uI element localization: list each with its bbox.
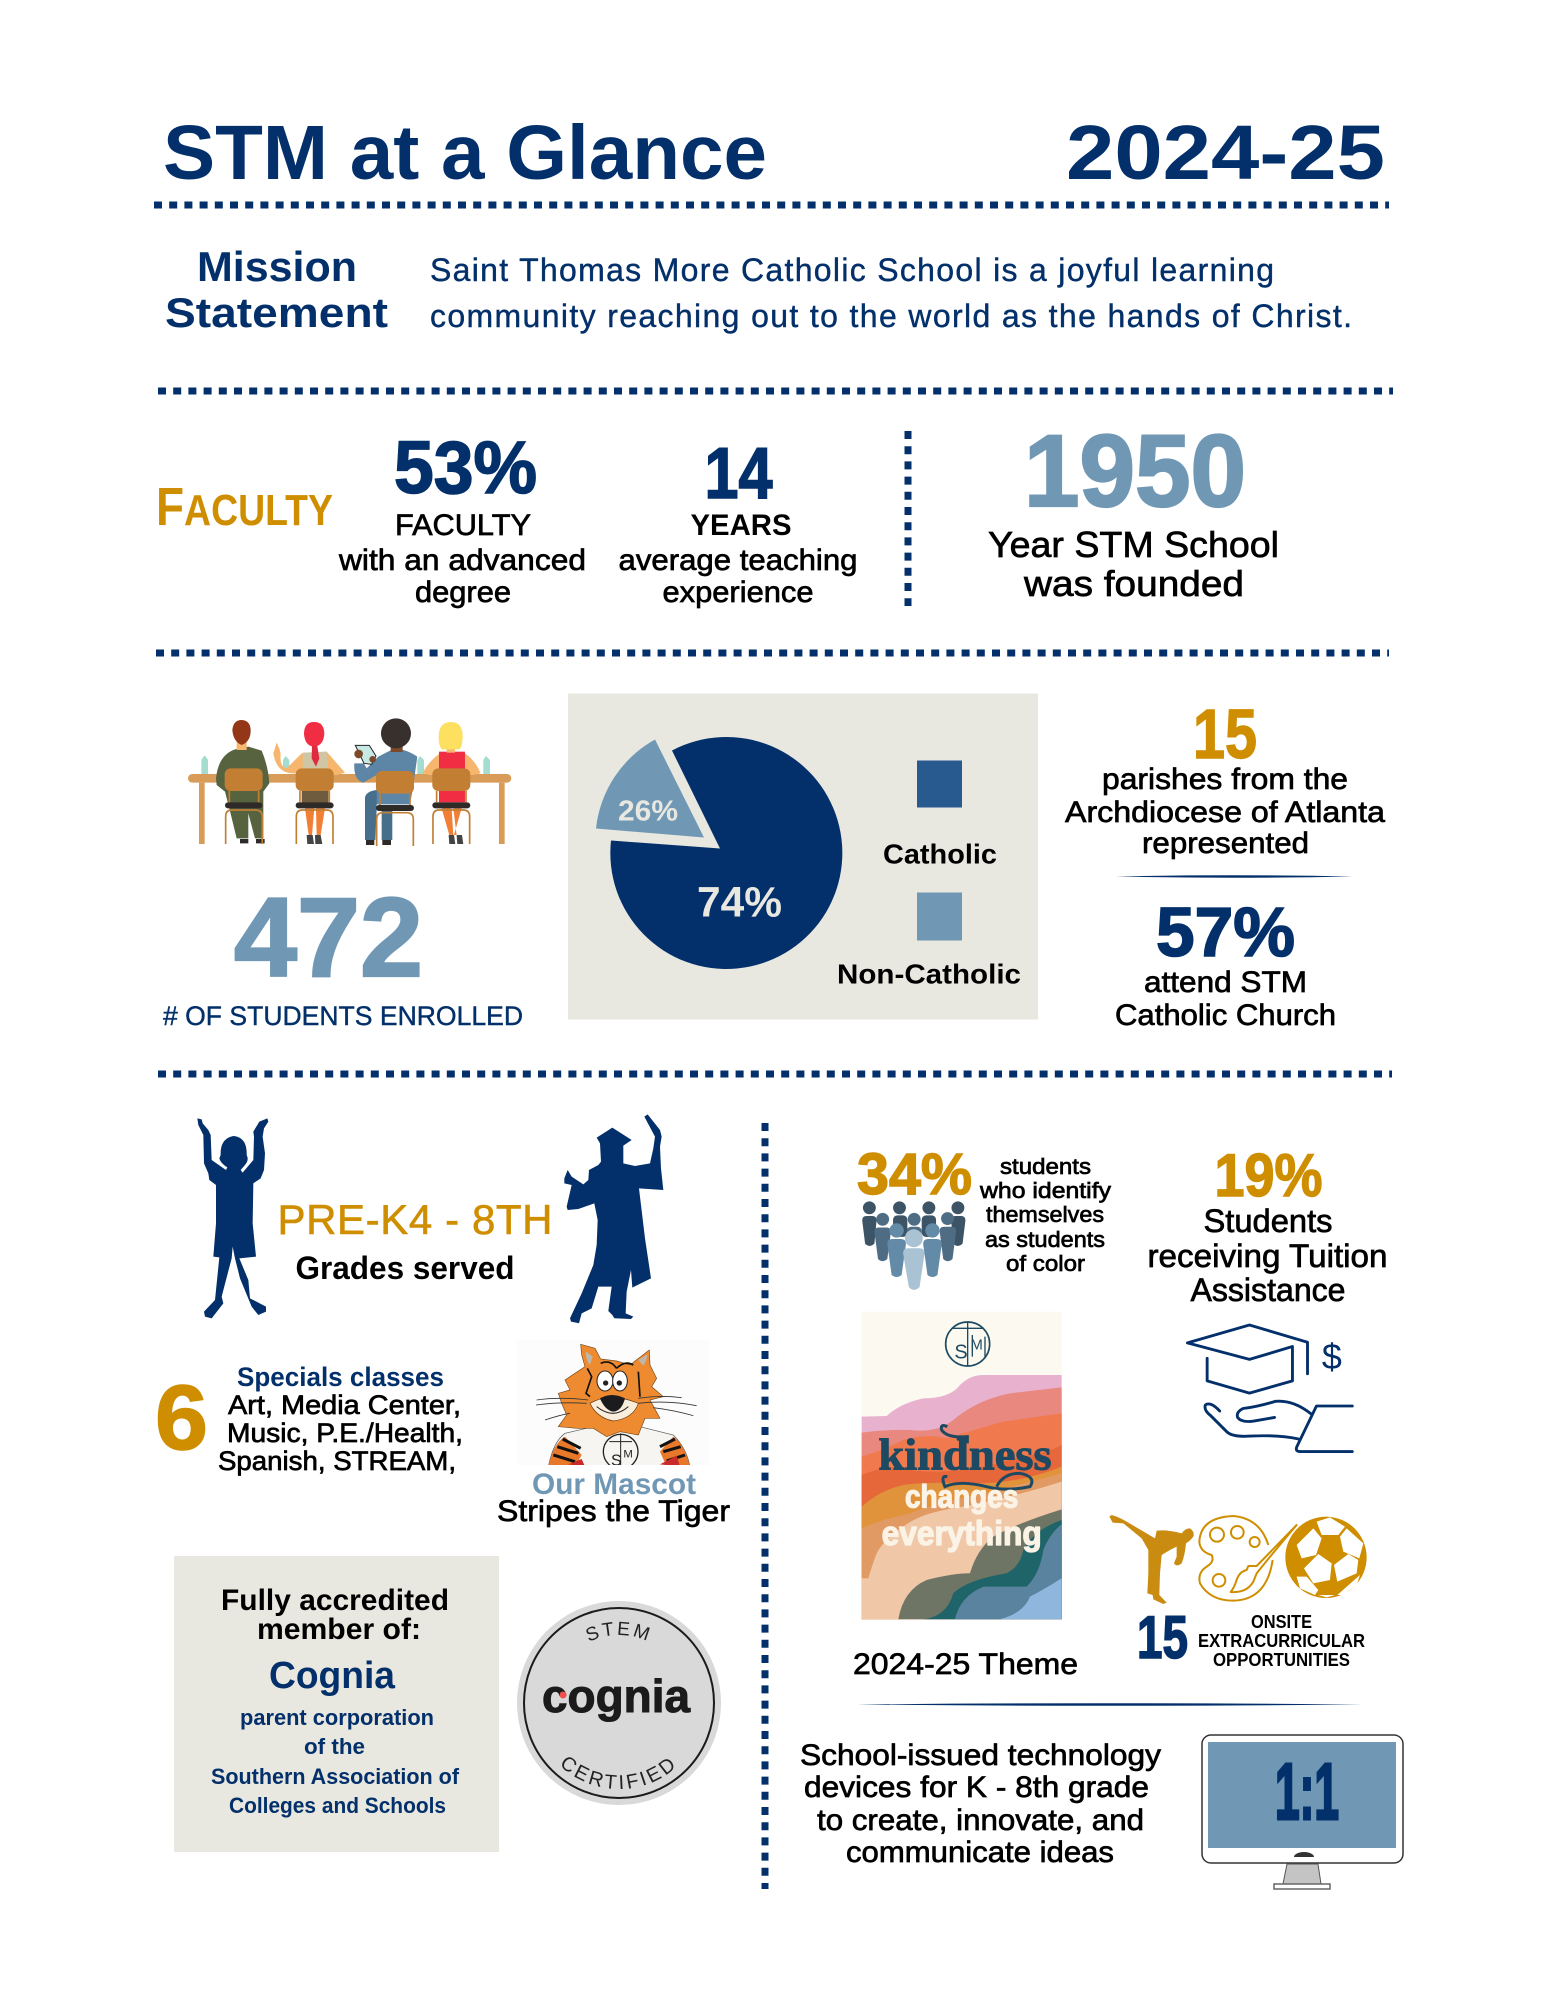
faculty stat: 53%: 53% <box>394 426 537 509</box>
specials classes: Spanish, STREAM, <box>218 1446 456 1476</box>
faculty stat: 14 years <box>618 434 858 609</box>
stat: tuition assistance: Assistance <box>1190 1272 1346 1308</box>
stat: tuition assistance: Students <box>1204 1203 1332 1239</box>
church attendance stat: Catholic Church <box>1115 999 1336 1032</box>
faculty stat: 53%: degree <box>415 576 511 609</box>
icon: tiger mascot: S <box>611 1453 622 1470</box>
poster: 2024-25 theme: M <box>971 1337 983 1353</box>
school year: 2024-25 <box>1066 110 1385 196</box>
pie label 26%: 26% <box>618 796 678 828</box>
specials classes: 6 <box>155 1367 208 1469</box>
technology text <box>800 1739 1161 1869</box>
grades served <box>278 1196 552 1286</box>
mission statement text <box>430 252 1352 334</box>
icon: graduate silhouette <box>564 1114 663 1323</box>
faculty label: FACULTY <box>156 477 333 537</box>
faculty stat: 53% <box>338 426 586 609</box>
stat: tuition assistance: 19% <box>1214 1142 1322 1209</box>
panel: accreditation: Cognia <box>269 1655 396 1697</box>
poster: 2024-25 theme <box>862 1312 1062 1619</box>
legend Non-Catholic <box>837 892 1021 990</box>
parishes stat: represented <box>1142 827 1309 860</box>
legend Non-Catholic: Non-Catholic <box>837 958 1021 990</box>
legend Catholic: Catholic <box>883 838 997 870</box>
faculty stat: 14 years: experience <box>662 576 814 609</box>
stat: students of color: as students <box>985 1227 1105 1252</box>
icon: paint palette <box>1199 1516 1297 1601</box>
icon: computer monitor 1:1: 1:1 <box>1275 1747 1339 1836</box>
mascot caption: Our Mascot <box>532 1468 696 1501</box>
stat: students of color <box>857 1142 1111 1276</box>
founding year: 1950 <box>1024 414 1246 528</box>
panel: accreditation: member of: <box>257 1613 421 1646</box>
badge: Cognia STEM certified: STEM <box>586 1622 650 1640</box>
stat: extracurricular opportunities: ONSITE <box>1251 1612 1312 1632</box>
founding year <box>988 414 1279 604</box>
pie slice: 26% <box>596 740 704 838</box>
icon: computer monitor 1:1 <box>1202 1735 1403 1889</box>
icon: group of people <box>862 1201 965 1290</box>
grades served: PRE-K4 - 8TH <box>278 1196 552 1243</box>
poster: 2024-25 theme: kindness <box>878 1429 1052 1479</box>
illustration: students at table <box>188 718 511 846</box>
pie slice: 74% <box>610 737 842 969</box>
icon: child silhouette <box>197 1118 268 1318</box>
badge: Cognia STEM certified: cognia <box>542 1670 690 1722</box>
mission statement text: community reaching out to the world as the hands of Christ. <box>430 298 1352 334</box>
stat: extracurricular opportunities: OPPORTUNITIES <box>1213 1650 1350 1670</box>
technology text: School-issued technology <box>800 1739 1161 1772</box>
stat: students of color: 34% <box>857 1142 972 1207</box>
specials classes <box>155 1362 463 1476</box>
stat: students of color: students <box>1000 1154 1091 1179</box>
title: STM at a Glance <box>163 110 767 196</box>
stat: tuition assistance <box>1148 1142 1388 1308</box>
stat: extracurricular opportunities: 15 <box>1137 1604 1188 1671</box>
poster: 2024-25 theme: S <box>954 1342 968 1364</box>
church attendance stat: attend STM <box>1144 966 1307 999</box>
panel: accreditation: parent corporation <box>240 1705 434 1730</box>
panel: accreditation <box>174 1556 499 1852</box>
faculty stat: 53%: FACULTY <box>395 509 531 542</box>
mission statement heading <box>165 243 388 336</box>
panel: accreditation: Southern Association of <box>211 1764 460 1789</box>
badge: Cognia STEM certified: CERTIFIED <box>562 1757 674 1789</box>
mission statement heading: Mission <box>197 243 357 290</box>
panel: Catholic pie chart <box>568 694 1038 1020</box>
mascot caption <box>497 1468 730 1528</box>
stat: students of color: who identify <box>979 1178 1111 1203</box>
stat: tuition assistance: receiving Tuition <box>1148 1238 1388 1274</box>
icon: tiger mascot: M <box>623 1449 633 1461</box>
faculty stat: 14 years: average teaching <box>618 544 858 577</box>
parishes stat: Archdiocese of Atlanta <box>1065 796 1385 829</box>
mascot caption: Stripes the Tiger <box>497 1495 730 1528</box>
icon: tiger mascot <box>536 1344 697 1465</box>
parishes stat: 15 <box>1193 695 1257 773</box>
technology text: to create, innovate, and <box>817 1804 1144 1837</box>
enrollment label: # OF STUDENTS ENROLLED <box>163 1001 523 1031</box>
icon: karate kicker <box>1109 1515 1194 1604</box>
enrollment number: 472 <box>234 875 423 1000</box>
faculty stat: 14 years: 14 <box>704 434 772 514</box>
specials classes: Specials classes <box>237 1362 444 1392</box>
faculty stat: 53%: with an advanced <box>338 544 586 577</box>
stat: extracurricular opportunities <box>1137 1604 1365 1671</box>
church attendance stat: 57% <box>1156 893 1295 971</box>
parishes stat <box>1065 695 1385 860</box>
mission statement heading: Statement <box>165 289 388 336</box>
faculty stat: 14 years: YEARS <box>690 509 792 542</box>
poster: 2024-25 theme: changes <box>905 1477 1018 1514</box>
stat: extracurricular opportunities: EXTRACURRICULAR <box>1198 1631 1365 1651</box>
icon: graduation cap and helping hand: $ <box>1322 1337 1342 1377</box>
stat: students of color: of color <box>1006 1251 1085 1276</box>
specials classes: Music, P.E./Health, <box>227 1418 463 1448</box>
poster: 2024-25 theme: everything <box>882 1515 1042 1553</box>
panel: accreditation: Fully accredited <box>221 1584 449 1617</box>
icon: graduation cap and helping hand <box>1187 1325 1352 1452</box>
stat: students of color: themselves <box>986 1202 1104 1227</box>
mission statement text: Saint Thomas More Catholic School is a joyful learning <box>430 252 1274 288</box>
technology text: communicate ideas <box>846 1836 1114 1869</box>
founding year: Year STM School <box>988 524 1279 565</box>
technology text: devices for K - 8th grade <box>804 1771 1149 1804</box>
legend Catholic <box>883 760 997 870</box>
pie label 74%: 74% <box>697 878 782 926</box>
panel: accreditation: Colleges and Schools <box>229 1793 446 1818</box>
parishes stat: parishes from the <box>1102 763 1348 796</box>
panel: accreditation: of the <box>304 1734 365 1759</box>
icon: soccer ball <box>1285 1517 1367 1598</box>
founding year: was founded <box>1023 563 1244 604</box>
badge: Cognia STEM certified <box>517 1601 721 1805</box>
grades served: Grades served <box>296 1250 514 1286</box>
specials classes: Art, Media Center, <box>228 1390 461 1420</box>
theme caption: 2024-25 Theme <box>853 1648 1078 1681</box>
church attendance stat <box>1115 893 1336 1032</box>
